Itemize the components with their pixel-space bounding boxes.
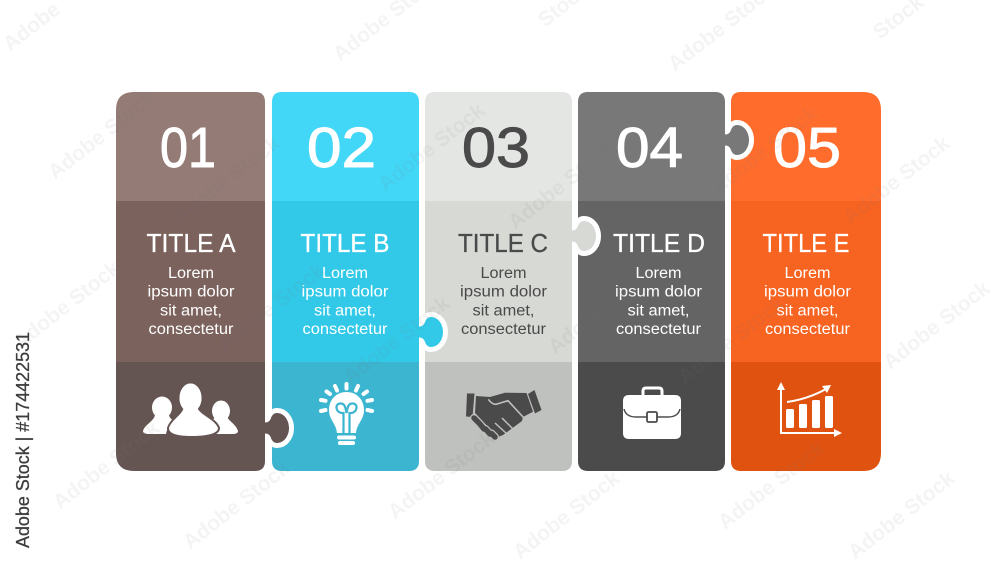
watermark pattern: Adobe Stock <box>384 427 499 524</box>
panel: D: 04 <box>616 116 683 180</box>
panel: B: 02 <box>307 116 376 180</box>
icon: light bulb <box>321 384 372 445</box>
puzzle tab: B into C <box>419 317 443 347</box>
icon: people <box>143 384 238 436</box>
watermark pattern: Adobe Stock <box>707 102 822 199</box>
panel: C: consectetur <box>461 321 546 338</box>
panel: C: 03 <box>462 116 530 180</box>
panel: B: consectetur <box>302 321 388 338</box>
panel: A: sit amet, <box>160 302 222 320</box>
panel: C: Lorem <box>480 265 526 282</box>
panel: B: ipsum dolor <box>302 284 388 300</box>
watermark pattern: Adobe Stock <box>544 262 659 359</box>
panel: A: ipsum dolor <box>148 284 234 300</box>
icon: briefcase <box>623 388 681 439</box>
watermark pattern: Adobe Stock <box>49 417 164 514</box>
panel: C: sit amet, <box>472 302 534 320</box>
panel: C <box>425 92 572 471</box>
watermark pattern: Adobe Stock <box>179 457 294 554</box>
watermark pattern: Adobe Stock <box>714 437 829 534</box>
icon: handshake <box>466 390 542 438</box>
watermark pattern: Adobe Stock <box>879 277 994 374</box>
panel: A: TITLE A <box>146 228 236 258</box>
icon: growth chart <box>777 382 842 437</box>
watermark pattern: Adobe Stock <box>44 87 159 184</box>
panel: B: sit amet, <box>314 302 376 320</box>
puzzle tab: C into D <box>572 221 596 251</box>
panel: E: TITLE E <box>762 228 850 258</box>
watermark pattern: Adobe Stock <box>214 259 329 356</box>
watermark pattern: Adobe Stock <box>509 467 624 563</box>
puzzle tab: A into B <box>265 413 289 443</box>
panel: E: consectetur <box>765 321 850 338</box>
panel: B: Lorem <box>322 265 368 282</box>
watermark pattern: Adobe Stock <box>674 292 789 389</box>
panel: D: ipsum dolor <box>615 284 702 300</box>
panel: E <box>731 92 881 471</box>
panel: A: Lorem <box>168 265 214 282</box>
watermark pattern: Adobe Stock <box>339 292 454 389</box>
panel: C: TITLE C <box>458 228 548 258</box>
watermark pattern: Adobe Stock <box>839 132 954 229</box>
panel: D: TITLE D <box>613 228 705 258</box>
panel: B <box>272 92 419 471</box>
panel: D <box>578 92 725 471</box>
panel: A: 01 <box>160 116 216 180</box>
panel: E: ipsum dolor <box>764 284 851 300</box>
panel: E: 05 <box>773 116 841 180</box>
panel: E: sit amet, <box>776 302 838 320</box>
watermark pattern: Adobe Stock <box>504 137 619 234</box>
panel: A: consectetur <box>148 321 234 338</box>
panel: D: Lorem <box>636 265 682 282</box>
watermark pattern: Adobe Stock <box>374 99 489 196</box>
side credit text: Adobe Stock | #174422531 <box>13 332 33 548</box>
panel: A <box>116 92 265 471</box>
panel: C: ipsum dolor <box>460 284 547 300</box>
panel: D: sit amet, <box>628 302 690 320</box>
watermark pattern: Adobe Stock <box>169 132 284 229</box>
watermark pattern: Adobe Stock <box>844 467 959 563</box>
watermark pattern: Adobe Stock <box>9 257 124 354</box>
panel: E: Lorem <box>784 265 830 282</box>
panel: D: consectetur <box>616 321 701 338</box>
puzzle tab: D into E <box>725 125 749 155</box>
panel: B: TITLE B <box>300 228 390 258</box>
